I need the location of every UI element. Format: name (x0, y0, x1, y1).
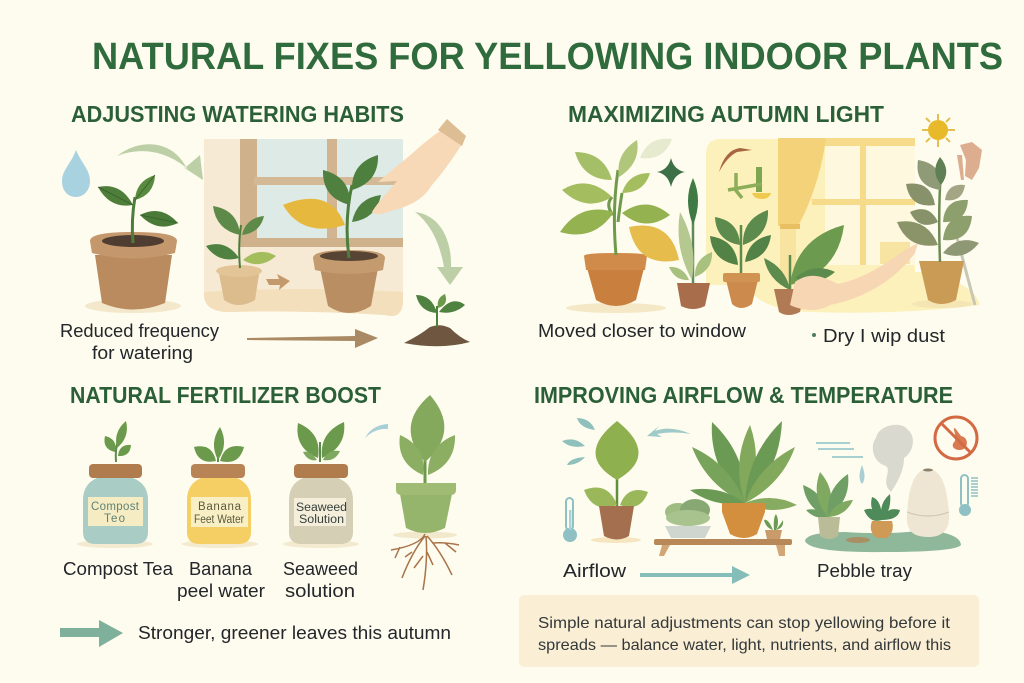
plant: medium in orange pot (710, 210, 771, 308)
jar: compost tea: Teo (104, 513, 125, 525)
label: banana peel water (177, 558, 265, 601)
panel: improving airflow and temperature (519, 382, 979, 667)
bowl of small plants (665, 499, 711, 538)
heading: fertilizer: NATURAL FERTILIZER BOOST (70, 382, 381, 408)
plant: green pot with roots (391, 395, 459, 590)
plant: held in hand with arm (764, 225, 918, 315)
callout (519, 595, 979, 667)
illustration: plant in terracotta pot (85, 175, 181, 313)
label: seaweed solution: solution (285, 580, 355, 601)
callout: Simple natural adjustments can stop yellowing before it (538, 615, 951, 632)
plant: large with yellow leaf (560, 139, 679, 313)
icon: thermometer left (563, 498, 577, 542)
jar: compost tea: Compost (91, 501, 140, 513)
jar: banana peel water (182, 427, 258, 548)
plant: tall snake plant (669, 178, 712, 309)
plant: broad leaf in brown pot (584, 421, 648, 543)
large green plant (690, 421, 797, 538)
panel: maximizing autumn light (538, 101, 982, 346)
label: banana peel water: peel water (177, 580, 265, 601)
arrow: airflow (640, 566, 750, 584)
arrow: curved down (415, 212, 463, 285)
illustration: window scene (204, 139, 403, 316)
icon: blue curl (365, 424, 388, 438)
jar: banana peel water: Banana (198, 501, 242, 513)
label: seaweed solution: Seaweed (283, 558, 358, 579)
heading: light: MAXIMIZING AUTUMN LIGHT (568, 101, 884, 127)
icon: sparkle (657, 158, 685, 187)
heading: watering: ADJUSTING WATERING HABITS (71, 101, 404, 127)
pebble tray (803, 425, 961, 552)
label: reduced frequency: Reduced frequency (60, 320, 220, 341)
illustration: sunny window (706, 138, 980, 313)
jar: seaweed solution: Solution (299, 514, 344, 526)
panel: adjusting watering habits (60, 101, 470, 363)
label: compost tea: Compost Tea (63, 558, 174, 579)
plant on tray (803, 472, 853, 539)
arrow: curved left (647, 426, 691, 437)
label: for watering: for watering (92, 342, 193, 363)
arrow: brown (247, 329, 378, 348)
label: dry wipe dust: Dry I wip dust (823, 325, 945, 346)
title: NATURAL FIXES FOR YELLOWING INDOOR PLANTS (92, 36, 1003, 78)
heading: airflow: IMPROVING AIRFLOW & TEMPERATURE (534, 382, 953, 408)
arrow: teal (60, 620, 123, 647)
panel: natural fertilizer boost (60, 382, 459, 647)
arrow: curved green (117, 144, 203, 180)
icon: air lines (816, 443, 863, 457)
label: seaweed solution (283, 558, 358, 601)
jar: seaweed solution: Seaweed (296, 502, 347, 514)
label: moved closer: Moved closer to window (538, 320, 747, 341)
label: banana peel water: Banana (189, 558, 253, 579)
jar: seaweed solution (283, 422, 359, 548)
icon: hand touching leaf (372, 119, 466, 214)
humidifier with steam (873, 425, 949, 537)
label: stronger leaves: Stronger, greener leaves this autumn (138, 622, 451, 643)
icon: wind marks (562, 418, 595, 465)
icon: small drop (860, 465, 864, 484)
small plant on tray (864, 494, 900, 538)
jar: banana peel water: Feet Water (194, 514, 244, 526)
icon: no touch sign (935, 417, 977, 459)
label: pebble tray: Pebble tray (817, 560, 913, 581)
icon: sun (922, 114, 955, 147)
callout: spreads — balance water, light, nutrients, and airflow this (538, 637, 951, 654)
icon: thermometer right (959, 475, 978, 516)
plant: dusty plant with cloth (897, 142, 982, 308)
icon: water drop (62, 150, 90, 197)
label: airflow: Airflow (563, 560, 627, 581)
icon: decorative twig and bracket (719, 148, 771, 199)
icon: seedling on soil (404, 294, 470, 346)
jar: compost tea (77, 421, 153, 548)
small succulent (764, 514, 783, 539)
plant shelf (654, 421, 797, 556)
